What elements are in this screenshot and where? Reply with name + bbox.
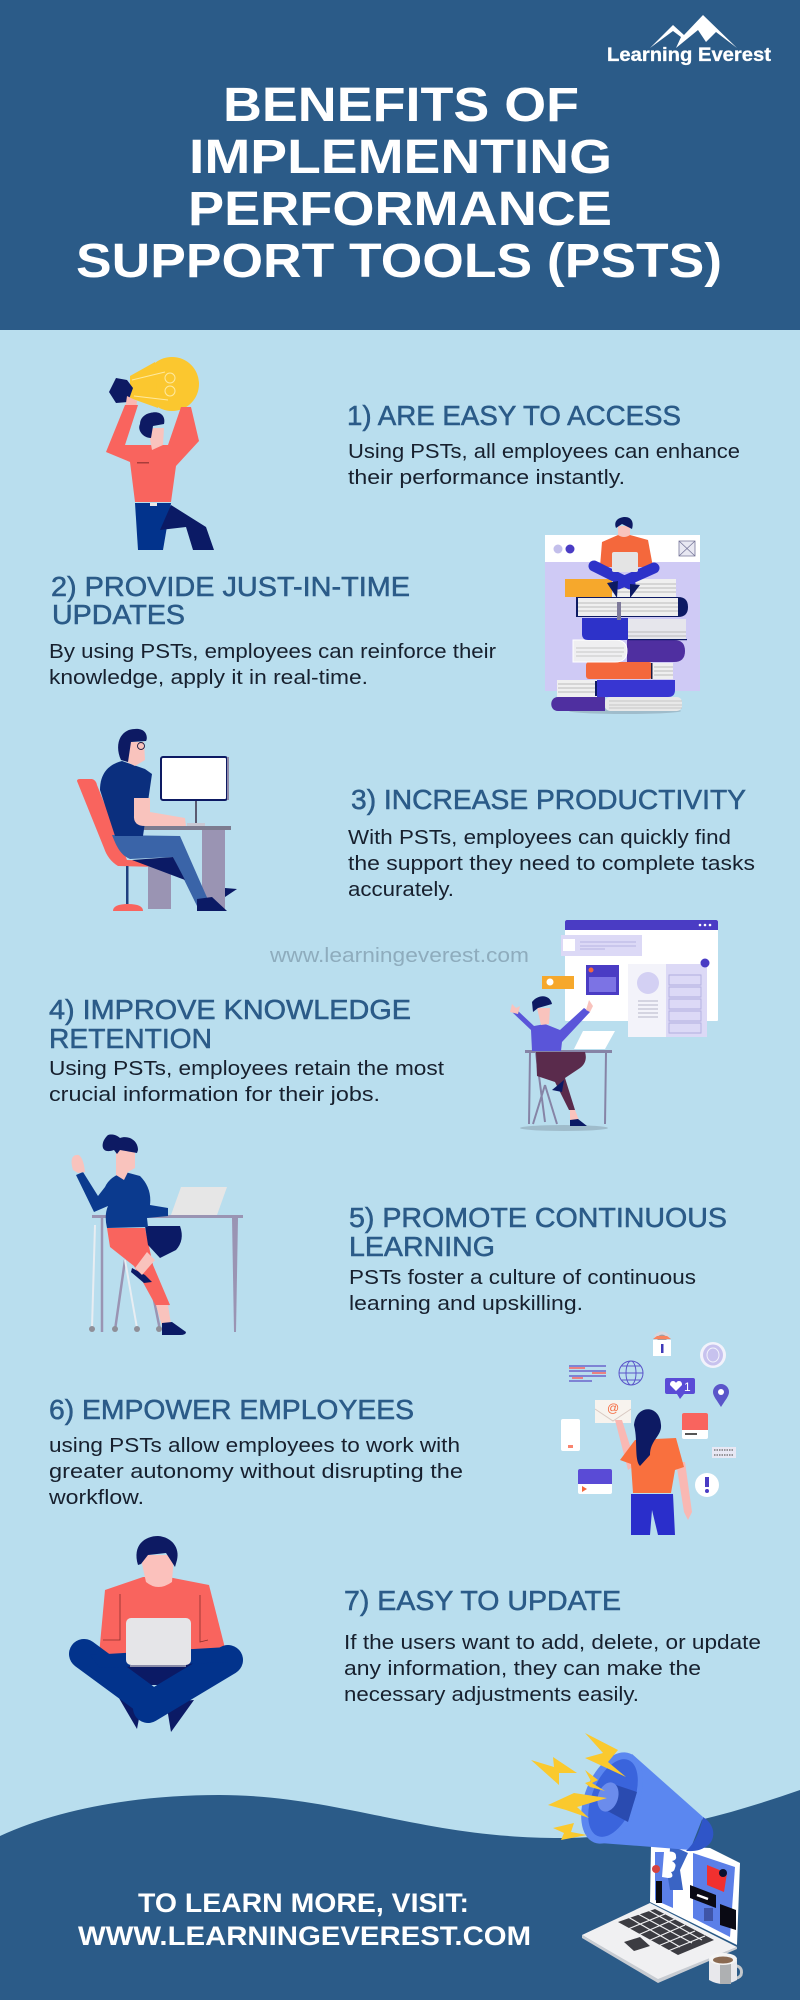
item 6 text: using PSTs allow employees to work with (49, 1435, 460, 1457)
title: SUPPORT TOOLS (PSTS) (76, 235, 722, 288)
item 3 text: the support they need to complete tasks (348, 853, 755, 875)
item 6 text: 6) EMPOWER EMPLOYEES (49, 1394, 414, 1425)
item 7 text: If the users want to add, delete, or update (344, 1632, 761, 1654)
item 1 text (347, 400, 740, 489)
icon: red card (682, 1413, 708, 1439)
icon: location pin (713, 1384, 729, 1407)
coffee mug (709, 1953, 742, 1984)
item 3 text: accurately. (348, 879, 454, 901)
icon: globe (619, 1361, 643, 1385)
megaphone (569, 1743, 713, 1890)
title: PERFORMANCE (188, 183, 612, 236)
item 5 text (349, 1202, 727, 1315)
item 1 text: 1) ARE EASY TO ACCESS (347, 400, 681, 431)
item 5 text: learning and upskilling. (349, 1293, 583, 1315)
item 1 text: their performance instantly. (348, 467, 625, 489)
icon: phone (561, 1419, 580, 1451)
icon: email (595, 1400, 631, 1423)
icon: email: @ (607, 1401, 619, 1415)
item 3 text: 3) INCREASE PRODUCTIVITY (351, 784, 746, 815)
illustration: person on a stack of books (545, 517, 700, 714)
lightning bolts (531, 1733, 626, 1840)
illustration: cross-legged man with laptop (84, 1536, 228, 1732)
logo: Learning Everest: Learning Everest (607, 45, 772, 66)
item 6 text (48, 1394, 463, 1509)
item 4 text: crucial information for their jobs. (49, 1084, 380, 1106)
icon: lock (653, 1333, 671, 1356)
title (76, 79, 722, 288)
item 2 text (49, 571, 496, 689)
item 7 text: necessary adjustments easily. (344, 1684, 639, 1706)
item 4 text: 4) IMPROVE KNOWLEDGE (49, 994, 411, 1025)
item 4 text (49, 994, 444, 1106)
illustration: woman surrounded by app icons (561, 1333, 736, 1535)
title: BENEFITS OF (223, 79, 579, 132)
item 7 text: any information, they can make the (344, 1658, 701, 1680)
item 5 text: LEARNING (349, 1231, 495, 1262)
footer call to action: TO LEARN MORE, VISIT: (138, 1888, 469, 1918)
item 2 text: By using PSTs, employees can reinforce their (49, 641, 496, 663)
item 2 text: UPDATES (52, 599, 185, 630)
icon: heart notification: 1 (684, 1380, 691, 1394)
item 4 text: Using PSTs, employees retain the most (49, 1058, 444, 1080)
item 3 text (348, 784, 755, 901)
title: IMPLEMENTING (189, 131, 612, 184)
icon: fingerprint (700, 1342, 726, 1368)
icon: keyboard (712, 1447, 736, 1458)
laptop screen (650, 1845, 740, 1945)
illustration: man at computer (77, 729, 237, 911)
item 6 text: workflow. (48, 1487, 144, 1509)
laptop base and keyboard (582, 1903, 737, 1983)
footer call to action: WWW.LEARNINGEVEREST.COM (78, 1921, 531, 1951)
item 1 text: Using PSTs, all employees can enhance (348, 441, 740, 463)
icon: code block (569, 1366, 606, 1381)
illustration: woman at desk with web windows (510, 920, 718, 1131)
footer call to action (78, 1888, 531, 1951)
item 2 text: knowledge, apply it in real-time. (49, 667, 368, 689)
item 6 text: greater autonomy without disrupting the (49, 1461, 463, 1483)
illustration: man holding light bulb (106, 357, 214, 550)
logo: Learning Everest (607, 15, 772, 66)
icon: heart notification (665, 1378, 695, 1399)
item 2 text: 2) PROVIDE JUST-IN-TIME (51, 571, 410, 602)
icon: video card (578, 1469, 612, 1494)
illustration: woman on stool with laptop (72, 1134, 243, 1335)
item 5 text: 5) PROMOTE CONTINUOUS (349, 1202, 727, 1233)
icon: exclamation (695, 1473, 719, 1497)
header band (0, 0, 800, 330)
illustration: laptop with megaphone (531, 1733, 742, 1984)
item 3 text: With PSTs, employees can quickly find (348, 827, 731, 849)
item 7 text: 7) EASY TO UPDATE (344, 1585, 621, 1616)
woman figure (615, 1409, 692, 1535)
item 7 text (344, 1585, 761, 1706)
footer wave (0, 1790, 800, 2000)
item 4 text: RETENTION (49, 1023, 212, 1054)
watermark url: www.learningeverest.com (269, 945, 529, 967)
item 5 text: PSTs foster a culture of continuous (349, 1267, 696, 1289)
